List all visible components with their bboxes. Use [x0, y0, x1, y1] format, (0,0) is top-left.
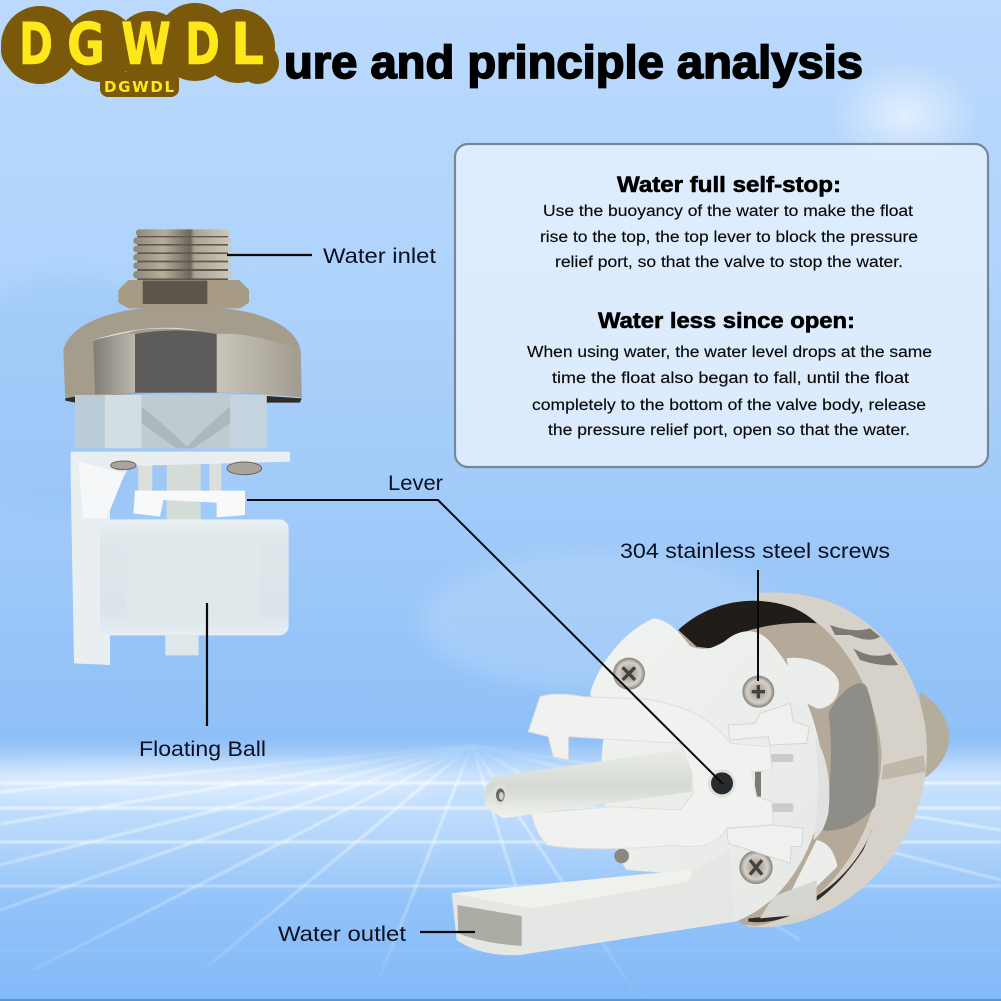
label: water inlet: Water inlet	[323, 244, 436, 268]
text block: water full self-stop description	[540, 203, 918, 271]
lever	[133, 491, 245, 517]
thread	[133, 229, 232, 282]
outlet spout	[452, 850, 735, 955]
valve: side view	[63, 229, 302, 665]
inner stems	[130, 460, 222, 522]
inner chrome cavity	[678, 601, 882, 926]
screws	[111, 461, 262, 475]
fitting	[920, 692, 949, 780]
title: ure and principle analysis	[284, 36, 863, 88]
logo: DGWDL: L	[231, 10, 264, 78]
central stem	[485, 750, 692, 818]
text block: water less since open description: time the float also began to fall, until the float	[552, 370, 910, 387]
logo: DGWDL: DGWDL	[104, 78, 174, 96]
text block: water less since open description: When using water, the water level drops at the same	[527, 344, 932, 361]
text block: water full self-stop description: rise to the top, the top lever to block the pressure	[540, 229, 918, 246]
valve: front view	[452, 593, 949, 955]
inner plate disk edge	[813, 737, 829, 840]
label: floating ball: Floating Ball	[139, 737, 266, 761]
leader lines	[207, 255, 758, 932]
chrome ring	[747, 593, 927, 927]
text block: water less since open description	[527, 344, 932, 439]
heading: water full self-stop: Water full self-stop:	[617, 172, 841, 197]
logo: DGWDL: D	[19, 10, 53, 78]
lever arm	[528, 694, 773, 849]
screws	[613, 658, 774, 884]
guide pins	[755, 754, 793, 812]
heading: water less since open: Water less since open:	[598, 308, 855, 333]
logo: DGWDL: W	[121, 10, 171, 78]
silver body	[75, 395, 267, 448]
panel: principle text	[455, 144, 988, 467]
logo: DGWDL: D	[185, 10, 220, 78]
hex nut	[118, 280, 249, 308]
logo: DGWDL: G	[67, 10, 105, 78]
clips	[727, 703, 809, 863]
text block: water full self-stop description: Use the buoyancy of the water to make the float	[543, 203, 914, 220]
label: lever: Lever	[388, 472, 443, 495]
label: water outlet: Water outlet	[278, 922, 406, 946]
white mounting plate	[590, 618, 823, 922]
title: Struct	[135, 35, 262, 84]
text block: water less since open description: the pressure relief port, open so that the water.	[548, 422, 910, 439]
text block: water less since open description: completely to the bottom of the valve body, release	[532, 397, 926, 414]
white frame	[71, 452, 290, 665]
floating ball	[100, 519, 289, 655]
pivot hole	[708, 769, 736, 797]
logo: DGWDL	[1, 3, 279, 97]
chrome dome	[63, 308, 302, 403]
label: screws: 304 stainless steel screws	[620, 539, 890, 563]
text block: water full self-stop description: relief port, so that the valve to stop the water.	[555, 254, 903, 271]
